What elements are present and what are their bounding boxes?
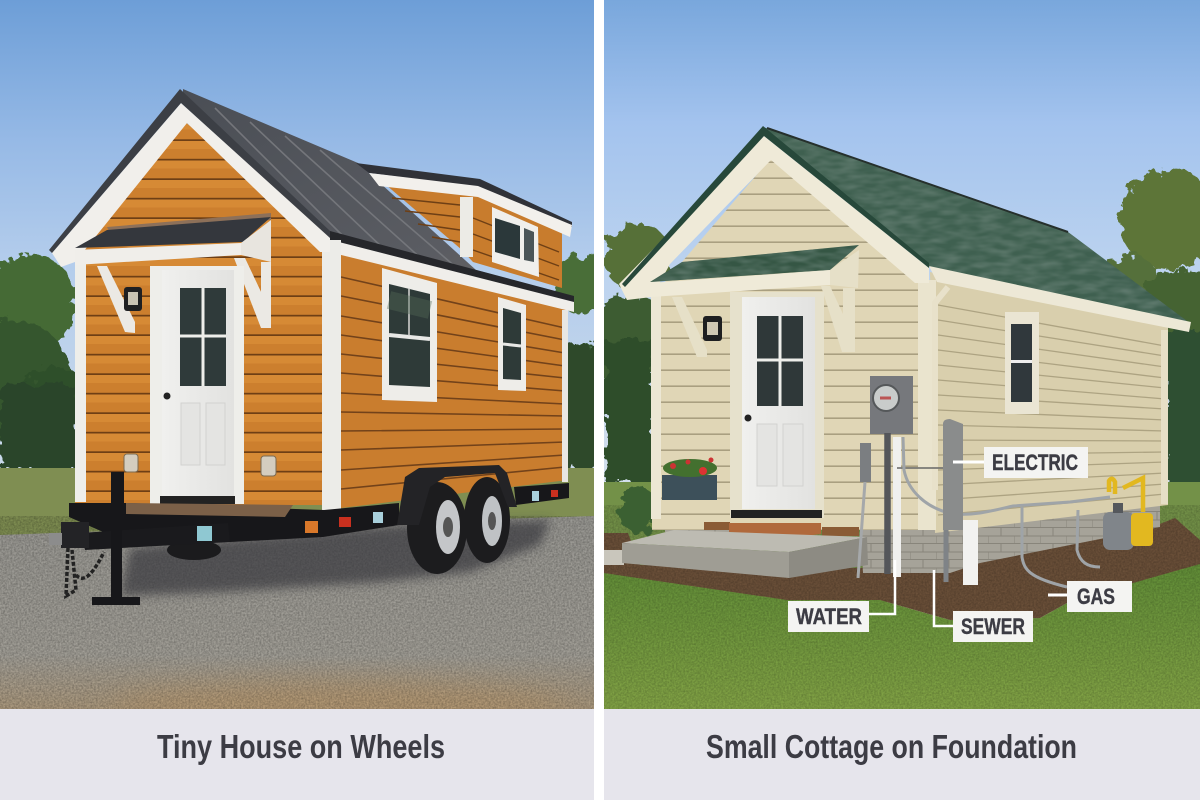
label: gas: GAS <box>1077 584 1115 609</box>
rear wheel <box>464 477 510 563</box>
label: electric <box>953 447 1088 478</box>
grey propane tank <box>1103 503 1134 550</box>
sky <box>604 0 1200 490</box>
gable trim <box>52 103 330 267</box>
electric pedestal <box>943 419 963 530</box>
tree line <box>0 254 621 470</box>
jack stand <box>92 472 140 605</box>
downspout <box>935 287 948 490</box>
front wheel <box>407 482 467 574</box>
front wall <box>652 158 932 530</box>
coupler <box>49 522 89 548</box>
porch fascia <box>75 243 241 265</box>
door <box>730 292 824 518</box>
porch cheek <box>830 250 859 288</box>
brick step <box>704 522 859 537</box>
gable roof edge <box>622 126 929 287</box>
porch brown flashing <box>107 213 271 230</box>
mulch bed <box>604 518 1200 620</box>
corner trim <box>75 262 86 502</box>
far wheel under deck <box>167 543 221 560</box>
porch roof <box>650 245 860 283</box>
label: electric: ELECTRIC <box>992 450 1078 475</box>
trailer <box>49 465 569 605</box>
dormer trim <box>369 173 572 237</box>
conduit and pipes <box>858 433 1110 587</box>
white sewer cleanout <box>963 520 978 585</box>
flower box <box>662 458 717 500</box>
shrub <box>619 486 657 534</box>
exterior lights <box>124 454 276 476</box>
caption: tiny house: Tiny House on Wheels <box>157 728 445 765</box>
trees <box>583 170 1200 492</box>
sky <box>0 0 594 480</box>
eave fascia <box>929 266 1191 332</box>
label: gas <box>1048 581 1132 612</box>
dormer wall <box>385 184 562 288</box>
label: sewer <box>934 570 1033 642</box>
foundation <box>860 503 1160 573</box>
side window large <box>382 268 437 402</box>
safety chain <box>66 548 104 596</box>
eave gutter band <box>330 231 574 303</box>
gable trim <box>619 136 929 300</box>
porch fascia <box>650 270 830 297</box>
gable roof edge <box>49 89 330 253</box>
brackets <box>97 266 135 333</box>
label: water <box>788 560 895 632</box>
gravel drive <box>0 516 594 709</box>
label: water: WATER <box>796 604 862 629</box>
grass <box>0 468 594 538</box>
side window small <box>498 297 526 391</box>
brackets <box>672 297 707 357</box>
electric meter <box>870 376 913 434</box>
fender <box>397 465 517 525</box>
reflectors and decals <box>197 490 558 541</box>
side wall <box>335 250 568 508</box>
frame rails <box>69 483 569 542</box>
panel: small cottage on foundation <box>583 0 1200 709</box>
side window <box>1005 312 1039 414</box>
side wall <box>930 272 1168 533</box>
caption: cottage <box>604 709 1200 800</box>
concrete stoop <box>622 530 868 578</box>
caption: cottage: Small Cottage on Foundation <box>706 728 1077 765</box>
wall lamp <box>703 316 722 341</box>
background lawn <box>604 482 1200 602</box>
door porch roof <box>75 217 271 248</box>
front wall <box>75 120 335 505</box>
metal roof <box>183 89 483 272</box>
ground shadow <box>120 520 550 596</box>
utility hookups <box>858 376 1153 587</box>
disconnect box <box>860 443 871 482</box>
front lawn <box>604 563 1200 709</box>
yellow propane tank <box>1109 478 1153 546</box>
porch cheek <box>241 220 271 262</box>
panel: tiny house on wheels <box>0 0 621 732</box>
wood deck <box>126 503 293 517</box>
label: sewer: SEWER <box>961 614 1025 639</box>
caption: tiny house <box>0 709 594 800</box>
wall lamp <box>124 287 142 311</box>
concrete walk <box>604 550 624 565</box>
dormer window <box>492 207 539 277</box>
eave fascia <box>331 240 574 312</box>
cottage body <box>619 126 1193 578</box>
tongue beam <box>84 532 229 550</box>
tiny house body <box>49 89 574 510</box>
green shingle roof <box>763 127 1193 325</box>
dormer roof edge <box>356 163 572 227</box>
door <box>150 266 244 504</box>
corner trim <box>651 280 936 530</box>
